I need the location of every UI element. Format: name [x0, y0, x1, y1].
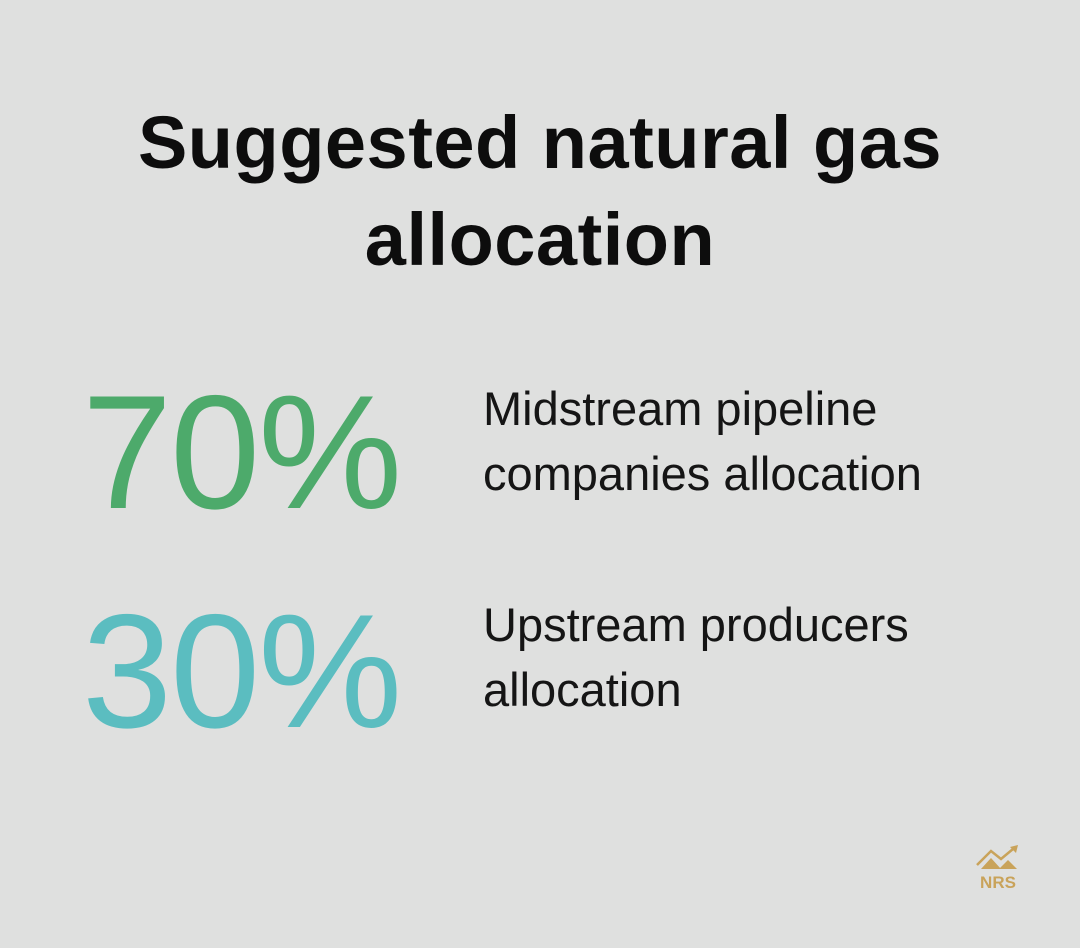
label: midstream [483, 382, 922, 500]
title: Suggested natural gas [138, 101, 942, 184]
title [138, 101, 942, 281]
label: upstream: allocation [483, 663, 682, 716]
logo: NRS [976, 845, 1018, 892]
label: midstream: companies allocation [483, 447, 922, 500]
stat: 30%: 30% [82, 581, 400, 762]
label: upstream: Upstream producers [483, 598, 909, 651]
title: allocation [365, 198, 715, 281]
label: midstream: Midstream pipeline [483, 382, 877, 435]
label: upstream [483, 598, 909, 716]
stat: 70%: 70% [82, 362, 400, 543]
logo: NRS: NRS [980, 873, 1016, 892]
